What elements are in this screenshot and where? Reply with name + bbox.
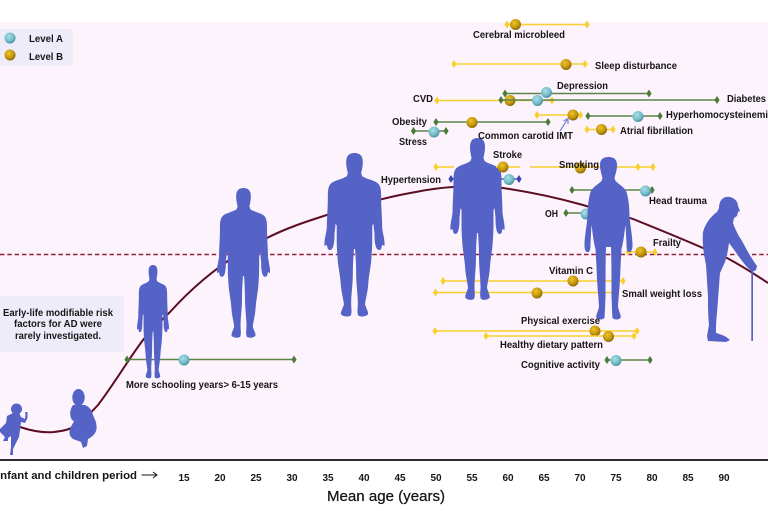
icon: middle-aged adult silhouette	[450, 138, 505, 300]
range: common carotid IMT	[534, 110, 583, 120]
x axis tick labels: 55	[466, 473, 478, 484]
risk factor labels: Atrial fibrillation	[620, 126, 693, 137]
risk factor labels: Cerebral microbleed	[473, 30, 565, 41]
range: physical exercise	[432, 326, 640, 336]
risk factor labels: Physical exercise	[521, 316, 600, 327]
x axis line	[0, 459, 768, 461]
x axis: infant and children period label: Infant and children period	[0, 470, 137, 482]
range: cerebral microbleed	[504, 19, 590, 30]
risk factor labels: Frailty	[653, 238, 681, 249]
risk factor labels: Sleep disturbance	[595, 61, 677, 72]
range: hyperhomocysteinemia	[585, 111, 663, 122]
legend	[0, 29, 73, 66]
x axis title: Mean age (years)	[327, 489, 445, 505]
icon: elderly person with cane	[703, 197, 757, 342]
x axis tick labels: 65	[538, 473, 550, 484]
range: cognitive activity	[604, 355, 653, 366]
range: sleep disturbance	[451, 59, 588, 70]
x axis tick labels: 70	[574, 473, 586, 484]
risk factor labels: OH	[545, 209, 558, 220]
risk factor labels: Diabetes	[727, 94, 766, 105]
risk factor labels: Stress	[399, 137, 427, 148]
cognitive trajectory curve	[20, 187, 768, 432]
legend item: Level B: Level B	[29, 52, 63, 63]
risk factor labels: Smoking	[559, 160, 599, 171]
callout: early-life factors: rarely investigated.	[15, 331, 101, 342]
x axis tick labels: 25	[250, 473, 262, 484]
x axis tick labels	[178, 473, 730, 484]
range: small weight loss	[433, 288, 615, 298]
callout: early-life factors: factors for AD were	[14, 319, 102, 330]
risk factor labels: Head trauma	[649, 196, 707, 207]
x axis tick labels: 15	[178, 473, 190, 484]
icon: young adult silhouette	[217, 188, 270, 338]
reference dashed line	[0, 254, 768, 256]
risk factor labels: Healthy dietary pattern	[500, 340, 603, 351]
range: head trauma	[569, 186, 655, 196]
x axis tick labels: 50	[430, 473, 442, 484]
range: vitamin C	[440, 276, 626, 286]
range: CVD	[434, 95, 555, 106]
risk factor labels: Common carotid IMT	[478, 131, 573, 142]
risk factor labels: Stroke	[493, 150, 522, 161]
x axis tick labels: 35	[322, 473, 334, 484]
legend item: Level A: Level A	[29, 34, 63, 45]
risk factor labels: Obesity	[392, 117, 427, 128]
range: more schooling years	[124, 354, 297, 366]
range: atrial fibrillation	[584, 124, 616, 135]
icon: adult silhouette	[324, 153, 385, 316]
range: diabetes	[498, 95, 720, 106]
x axis tick labels: 80	[646, 473, 658, 484]
risk factor labels: More schooling years> 6-15 years	[126, 380, 278, 391]
range: smoking	[530, 162, 656, 174]
risk factor labels: Depression	[557, 81, 608, 92]
x axis tick labels: 90	[718, 473, 730, 484]
risk factor labels: CVD	[413, 94, 433, 105]
range: stress	[411, 126, 449, 138]
x axis tick labels: 60	[502, 473, 514, 484]
range: obesity	[433, 117, 551, 128]
x axis tick labels: 20	[214, 473, 226, 484]
risk factor labels: Cognitive activity	[521, 360, 600, 371]
x axis tick labels: 30	[286, 473, 298, 484]
x axis tick labels: 45	[394, 473, 406, 484]
x axis tick labels: 40	[358, 473, 370, 484]
icon: boy silhouette	[137, 265, 169, 378]
x axis tick labels: 75	[610, 473, 622, 484]
risk factor labels: Vitamin C	[549, 266, 593, 277]
range: OH	[563, 208, 592, 220]
range: hypertension	[448, 174, 522, 185]
range: depression	[502, 87, 652, 98]
range: frailty	[625, 246, 658, 258]
range: healthy dietary pattern	[483, 331, 637, 342]
arrow: common carotid IMT	[560, 118, 568, 131]
callout: early-life factors	[0, 296, 124, 352]
range: stroke	[433, 162, 520, 172]
risk factor labels	[126, 30, 768, 391]
risk factor labels: Small weight loss	[622, 289, 702, 300]
icon: infant silhouette	[0, 404, 28, 455]
icon: older adult silhouette	[584, 157, 632, 320]
x axis tick labels: 85	[682, 473, 694, 484]
risk factor labels: Hypertension	[381, 175, 441, 186]
icon: child silhouette	[69, 389, 97, 448]
callout: early-life factors: Early-life modifiable risk	[3, 308, 113, 319]
